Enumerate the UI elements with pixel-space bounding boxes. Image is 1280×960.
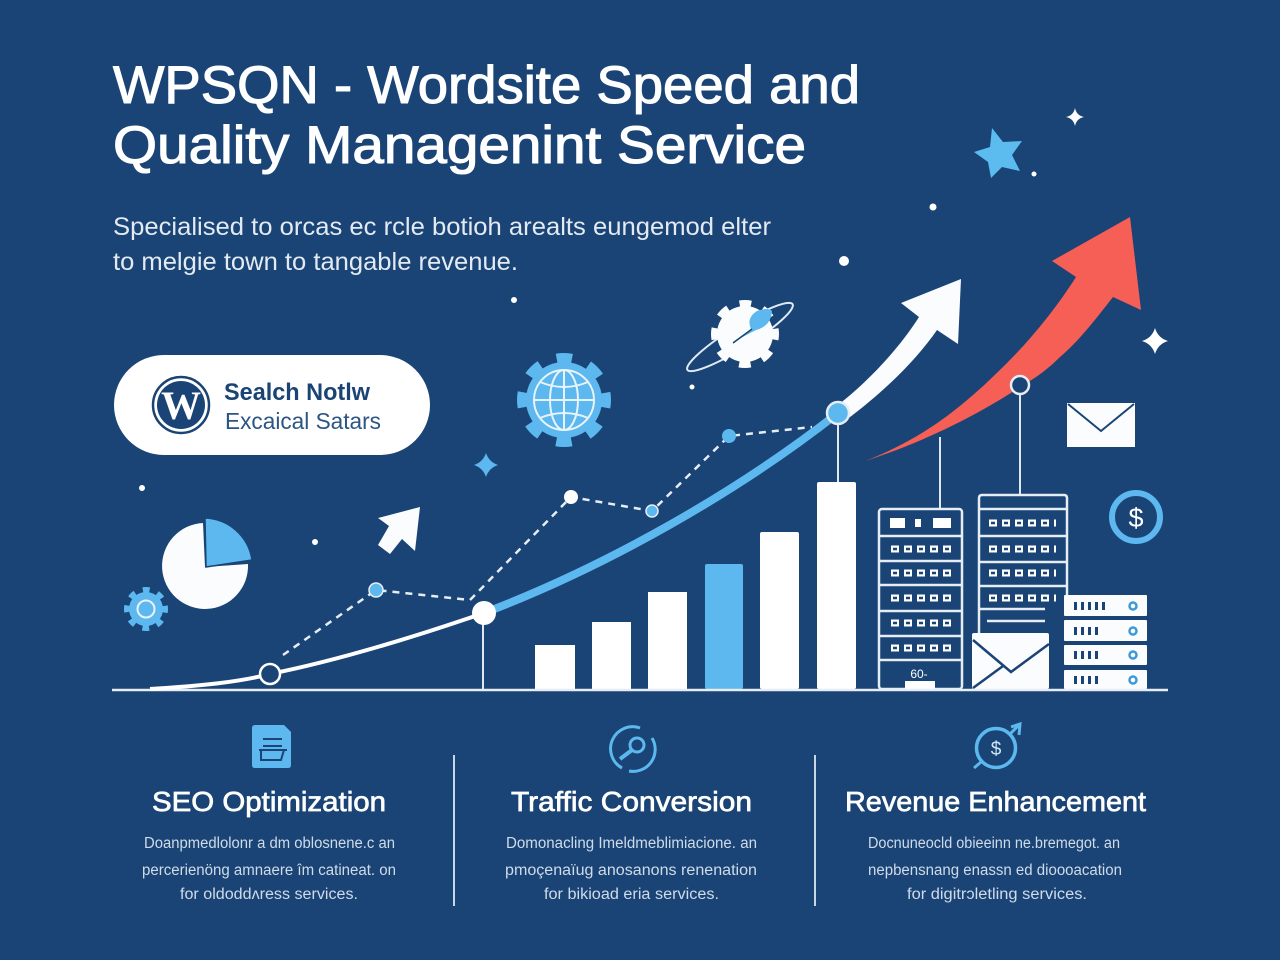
subtitle text block (113, 213, 771, 276)
pie chart (162, 518, 252, 609)
icon: revenue coin with arrow (974, 724, 1020, 768)
description: Docnuneocld obieeinn ne.bremegot. an (868, 835, 1120, 852)
description: pmoçenaïug anosanons renenation (505, 862, 757, 879)
panel: Traffic Conversion (505, 727, 757, 903)
icon: globe gear (523, 359, 605, 441)
arrow: main growth curve (150, 279, 961, 689)
connector lines (483, 385, 1020, 689)
divider two (814, 755, 816, 906)
heading: SEO Optimization (152, 786, 386, 817)
icon: traffic cycle (611, 727, 655, 771)
icon: WordPress logo (153, 377, 209, 433)
description (868, 835, 1122, 903)
description: for oldoddʌress services. (180, 886, 358, 903)
subtitle text block: to melgie town to tangable revenue. (113, 248, 518, 276)
icon: dollar coin (1112, 493, 1160, 541)
pill text: Sealch Notlw (224, 379, 370, 406)
arrow: red growth arrow (865, 217, 1141, 461)
axis baseline (112, 689, 1168, 691)
chart markers (260, 376, 1029, 684)
decorative dots and sparkles (139, 108, 1168, 545)
icon: document (252, 725, 291, 768)
description (505, 835, 757, 903)
arrow: small white arrow (378, 507, 420, 554)
left server rack: 60- (910, 667, 928, 681)
bar chart (535, 482, 856, 689)
panel: Revenue Enhancement (845, 724, 1146, 903)
description: for digitrɔletling services. (907, 886, 1087, 903)
right server rack (979, 495, 1067, 689)
description: Doanpmedlolonr a dm oblosnene.c an (144, 835, 395, 852)
pill text: Excaical Satars (225, 408, 381, 434)
icon: WordPress logo: W (161, 383, 201, 428)
left server rack (879, 509, 962, 689)
title (113, 56, 860, 175)
title: WPSQN - Wordsite Speed and (113, 56, 860, 115)
subtitle text block: Specialised to orcas ec rcle botioh arealts eungemod elter (113, 213, 771, 241)
icon: large envelope (972, 633, 1049, 689)
description: nepbensnang enassn ed dioooacation (868, 862, 1122, 879)
chart: growth bars, axis and servers (112, 385, 1168, 690)
description: Domonacling Imeldmeblimiacione. an (506, 835, 757, 852)
icon: small blue gear (128, 590, 164, 628)
icon: blue star (974, 128, 1022, 178)
pill text (224, 379, 381, 434)
small server stack (1064, 595, 1147, 689)
panel: SEO Optimization (142, 725, 396, 903)
description: percerienöng amnaere îm catineat. on (142, 862, 396, 879)
callout: WordPress pill (114, 355, 430, 455)
dashed trend line (283, 427, 812, 655)
description: for bikioad eria services. (544, 886, 719, 903)
icon: envelope (1067, 403, 1135, 447)
heading: Traffic Conversion (511, 786, 752, 817)
icon: dollar coin: $ (1128, 503, 1144, 533)
icon: white gear with orbit (682, 295, 798, 379)
icon: revenue coin with arrow: $ (991, 739, 1002, 760)
divider one (453, 755, 455, 906)
description (142, 835, 396, 903)
heading: Revenue Enhancement (845, 786, 1146, 817)
title: Quality Managenint Service (113, 116, 806, 175)
